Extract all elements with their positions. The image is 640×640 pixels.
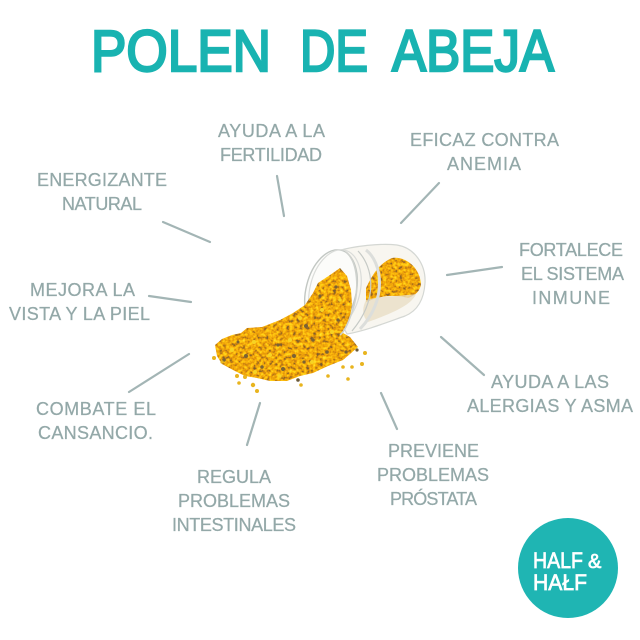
label: anemia: EFICAZ CONTRA: [410, 130, 559, 150]
spilled pollen pile: [215, 268, 358, 381]
title: [91, 19, 554, 84]
label: sight and skin: [9, 280, 150, 324]
label: immune system: EL SISTEMA: [521, 264, 624, 284]
title: POLEN: [91, 19, 271, 84]
label: fertility: AYUDA A LA: [218, 121, 325, 141]
label: immune system: [519, 240, 624, 308]
label: sight and skin: VISTA Y LA PIEL: [9, 304, 150, 324]
label: allergies and asthma: [467, 372, 633, 416]
jar body: [330, 244, 425, 334]
label: immune system: INMUNE: [532, 288, 610, 308]
pile dark specks: [222, 285, 348, 371]
label: anemia: [410, 130, 559, 174]
label: intestinal: PROBLEMAS: [178, 491, 290, 511]
jar rim inner: [301, 244, 369, 336]
label: sight and skin: MEJORA LA: [30, 280, 135, 300]
label: intestinal: INTESTINALES: [172, 515, 296, 535]
label group: benefits: [9, 121, 633, 535]
label: energizer: [37, 170, 167, 214]
label: tiredness: [36, 399, 156, 443]
jar rim front: [340, 252, 357, 335]
title: DE: [300, 19, 368, 84]
label: prostate: [377, 441, 489, 509]
illustration: jar with spilled pollen: [212, 244, 425, 393]
logo: Half & Half badge: [518, 518, 618, 618]
pile bright highlights: [230, 298, 342, 378]
logo wordmark: [533, 548, 602, 595]
label: tiredness: CANSANCIO.: [38, 423, 153, 443]
label: prostate: PROBLEMAS: [377, 465, 489, 485]
label: intestinal: [172, 467, 296, 535]
label: fertility: FERTILIDAD: [220, 145, 322, 165]
label: allergies and asthma: ALERGIAS Y ASMA: [467, 396, 633, 416]
jar opening: [297, 244, 365, 338]
label: immune system: FORTALECE: [519, 240, 623, 260]
logo wordmark: &: [588, 551, 602, 573]
logo wordmark: HAŁF: [533, 570, 587, 595]
badge circle: [518, 518, 618, 618]
label: energizer: ENERGIZANTE: [37, 170, 167, 190]
connector lines: [129, 176, 502, 445]
label: prostate: PREVIENE: [388, 441, 479, 461]
label: prostate: PRÓSTATA: [390, 488, 477, 509]
scattered grains: [212, 348, 367, 393]
label: allergies and asthma: AYUDA A LAS: [491, 372, 609, 392]
label: energizer: NATURAL: [62, 194, 142, 214]
label: fertility: [218, 121, 325, 165]
label: tiredness: COMBATE EL: [36, 399, 156, 419]
logo wordmark: HALF: [533, 548, 583, 573]
label: intestinal: REGULA: [197, 467, 271, 487]
title: ABEJA: [392, 19, 554, 84]
label: anemia: ANEMIA: [447, 154, 521, 174]
